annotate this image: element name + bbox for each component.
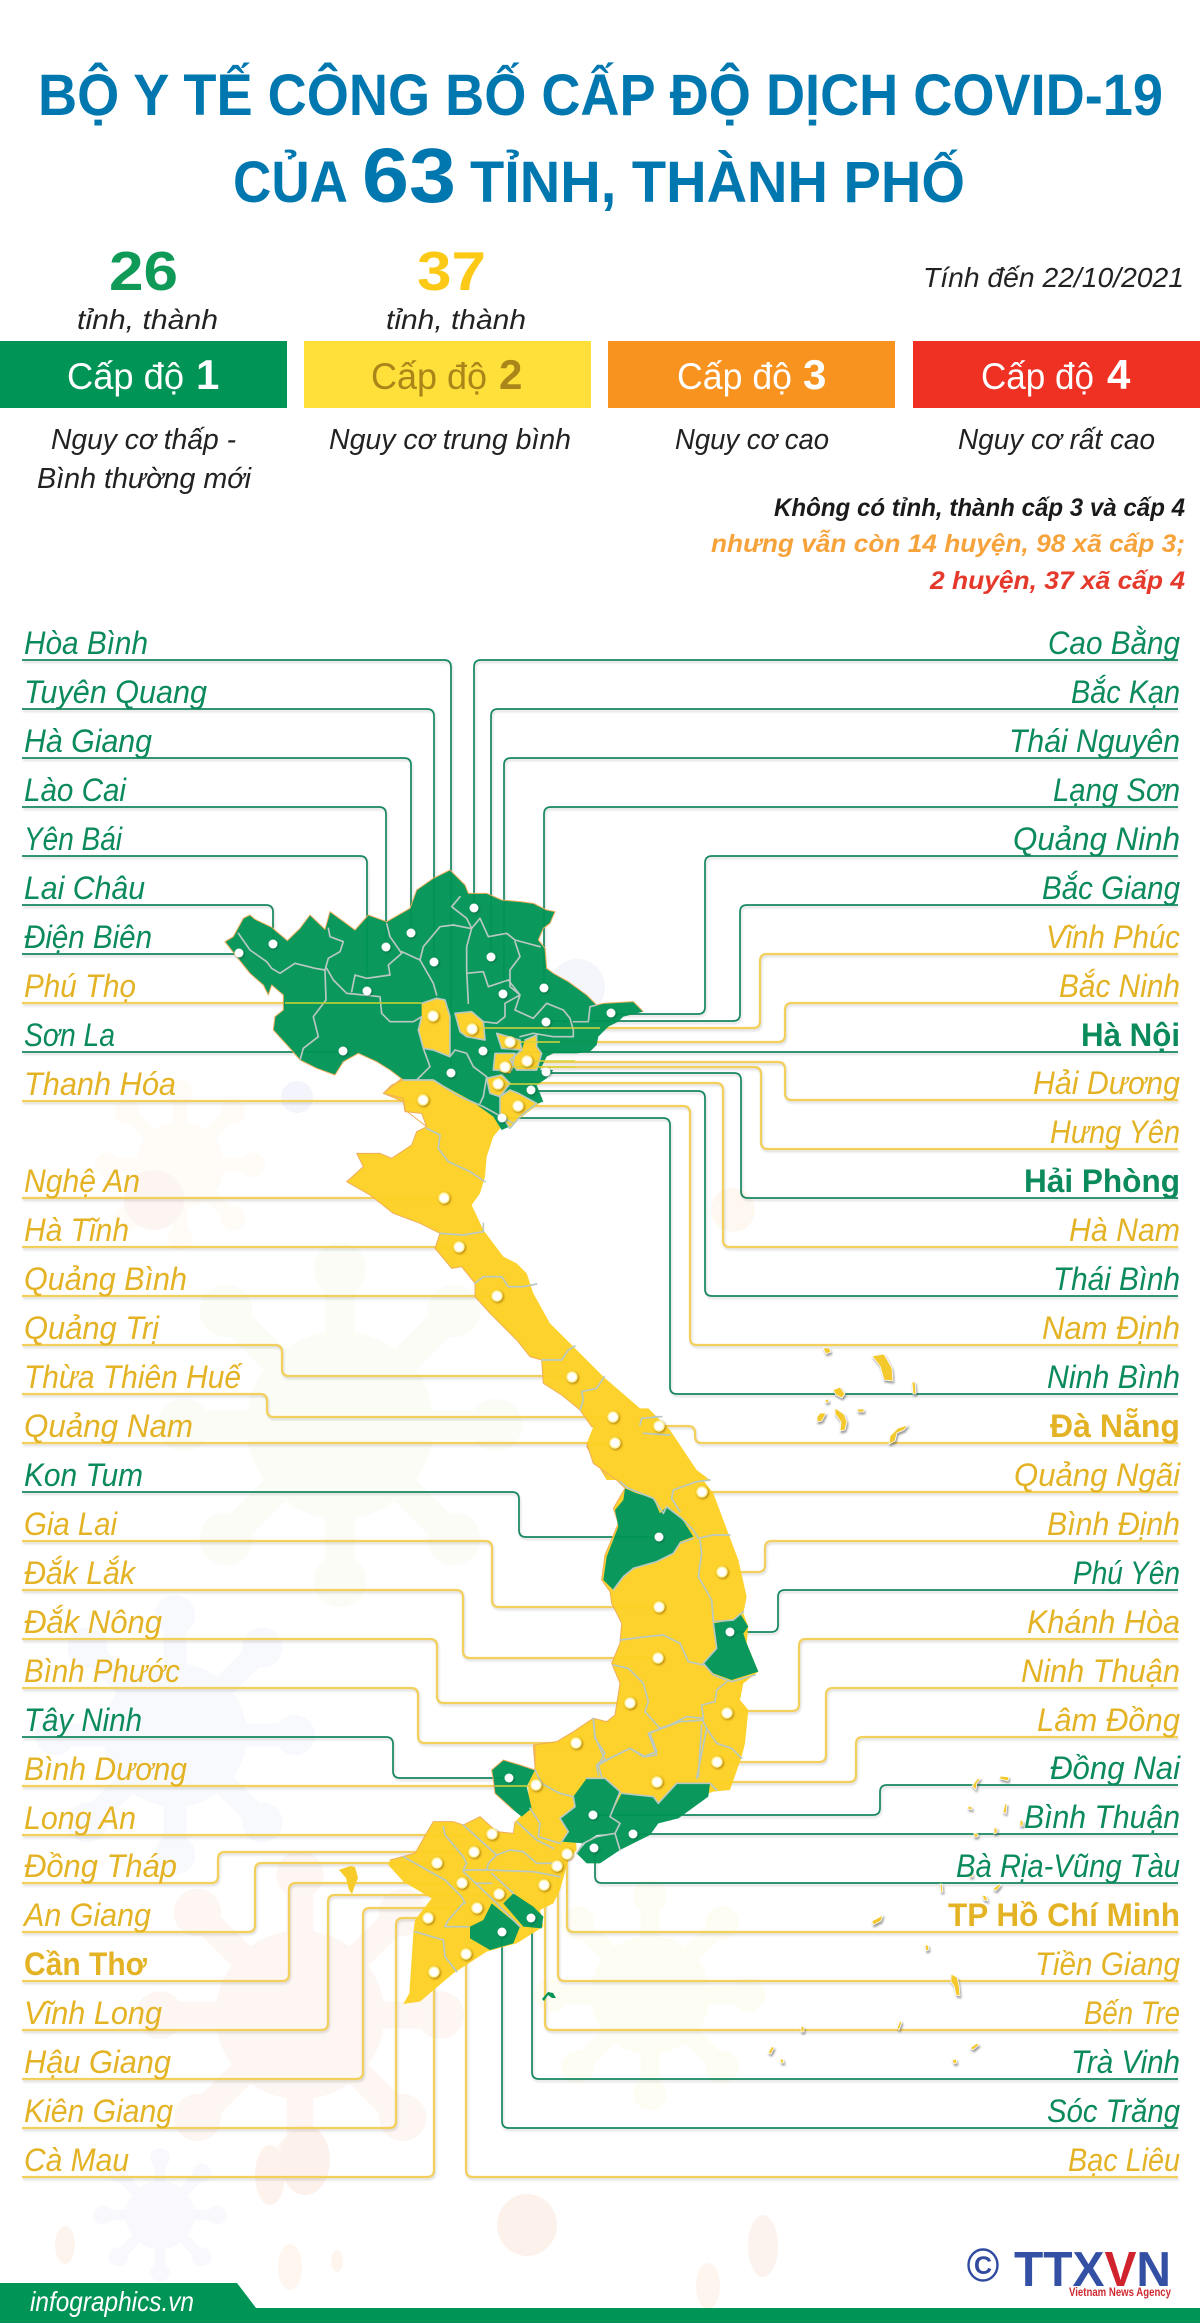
footer band	[0, 2283, 1200, 2323]
province labels: right column: Nam Định	[1042, 1310, 1180, 1346]
province: Phú Yên	[703, 1613, 758, 1680]
province labels: left column: Hà Giang	[24, 723, 152, 759]
province labels: left column: Quảng Bình	[24, 1261, 187, 1297]
province labels: right column: Hà Nam	[1069, 1212, 1180, 1248]
map: central highlands and south central coast	[528, 1410, 758, 1820]
province labels: right column: Bến Tre	[1084, 1995, 1180, 2031]
province labels: right column: Hưng Yên	[1050, 1114, 1180, 1150]
province labels: left column: Thanh Hóa	[24, 1066, 176, 1102]
note on districts level 3 and 4	[711, 494, 1185, 595]
province: Đồng Nai	[560, 1778, 620, 1843]
level 3 bar	[608, 341, 895, 408]
level 4 bar: Cấp độ	[981, 356, 1094, 397]
province labels: left column: Tuyên Quang	[24, 674, 207, 710]
province labels: right column: Ninh Thuận	[1021, 1653, 1180, 1689]
province: Phú Thọ	[418, 998, 450, 1057]
title: TỈNH, THÀNH PHỐ	[470, 150, 965, 215]
footer band: infographics.vn	[30, 2286, 194, 2317]
icon: copyright	[968, 2250, 998, 2280]
risk descriptions: Bình thường mới	[37, 463, 253, 495]
map: northern provinces	[225, 870, 643, 1130]
province labels: left column: Quảng Trị	[24, 1310, 160, 1346]
province: Hải Dương	[510, 1035, 542, 1070]
province labels: left column: Lai Châu	[24, 870, 145, 906]
risk descriptions: Nguy cơ thấp -	[51, 424, 236, 456]
level 2 bar: 2	[499, 351, 522, 398]
province labels: left column: Đắk Lắk	[24, 1555, 137, 1591]
province labels: left column: Tây Ninh	[24, 1702, 142, 1738]
province labels: left column: Đắk Nông	[24, 1604, 162, 1640]
province labels: right column: Vĩnh Phúc	[1046, 919, 1180, 955]
risk descriptions	[37, 424, 1155, 495]
province: Bình Thuận	[610, 1783, 710, 1850]
province: Tây Ninh	[492, 1760, 535, 1817]
province labels: left column: Quảng Nam	[24, 1408, 193, 1444]
leader lines: yellow provinces	[22, 954, 1178, 2177]
province labels: left column: Long An	[24, 1800, 136, 1836]
stat: 37 provinces level 2: tỉnh, thành	[386, 304, 526, 335]
stat: 26 provinces level 1: tỉnh, thành	[77, 304, 218, 335]
province labels: right column: Bình Thuận	[1024, 1799, 1180, 1835]
province labels: left column: Điện Biên	[24, 919, 152, 955]
date note: Tính đến 22/10/2021	[923, 262, 1184, 293]
stat: 37 provinces level 2: 37	[417, 240, 486, 302]
province: Bắc Ninh	[497, 1033, 522, 1050]
title	[38, 63, 1163, 219]
title: 63	[362, 133, 456, 219]
level 1 bar: 1	[196, 351, 219, 398]
risk descriptions: Nguy cơ trung bình	[329, 424, 571, 456]
province labels: left column: Hà Tĩnh	[24, 1212, 129, 1248]
province labels: right column: Bình Định	[1047, 1506, 1180, 1542]
province labels: right column: Quảng Ninh	[1013, 821, 1180, 857]
province labels: right column: Thái Nguyên	[1009, 723, 1180, 759]
province labels: right column: Bắc Kạn	[1071, 674, 1180, 710]
stat: 37 provinces level 2	[386, 240, 526, 335]
province: Vĩnh Phúc	[455, 1012, 485, 1040]
province labels: left column: Phú Thọ	[24, 968, 136, 1004]
province labels: right column: Bạc Liêu	[1068, 2142, 1180, 2178]
map of Vietnam by epidemic level	[225, 870, 758, 2004]
stat: 26 provinces level 1	[77, 240, 218, 335]
province labels: right column: TP Hồ Chí Minh	[948, 1897, 1180, 1933]
province: Nam Định	[500, 1090, 537, 1128]
risk descriptions: Nguy cơ rất cao	[958, 424, 1155, 456]
province labels: left column: Bình Phước	[24, 1653, 180, 1689]
province labels: right column: Khánh Hòa	[1027, 1604, 1180, 1640]
province labels: right column: Sóc Trăng	[1047, 2093, 1180, 2129]
province labels: left column: Bình Dương	[24, 1751, 187, 1787]
map: central coast	[347, 1063, 710, 1480]
province labels: right column: Lạng Sơn	[1053, 772, 1180, 808]
province labels: left column: Gia Lai	[24, 1506, 118, 1542]
note on districts level 3 and 4: 2 huyện, 37 xã cấp 4	[929, 567, 1185, 595]
level 3 bar: 3	[803, 351, 826, 398]
province labels: right column: Ninh Bình	[1047, 1359, 1180, 1395]
province labels: right column	[948, 625, 1181, 2178]
province labels: left column: Yên Bái	[24, 821, 123, 857]
province labels: left column: Cà Mau	[24, 2142, 129, 2178]
note on districts level 3 and 4: Không có tỉnh, thành cấp 3 và cấp 4	[774, 494, 1185, 522]
province labels: left column: Cần Thơ	[24, 1946, 147, 1982]
map: southeast and Mekong delta	[388, 1718, 717, 2004]
province labels: left column: Đồng Tháp	[24, 1848, 177, 1884]
province labels: right column: Đà Nẵng	[1050, 1408, 1180, 1444]
province labels: right column: Đồng Nai	[1050, 1750, 1181, 1786]
leader lines: green provinces	[22, 660, 1178, 2128]
province labels: right column: Trà Vinh	[1071, 2044, 1180, 2080]
map markers: yellow provinces	[418, 1011, 732, 1977]
province labels: right column: Thái Bình	[1053, 1261, 1180, 1297]
risk descriptions: Nguy cơ cao	[675, 424, 829, 456]
province labels: right column: Phú Yên	[1073, 1555, 1180, 1591]
island: Phú Quốc	[339, 1866, 358, 1894]
province labels: left column: Thừa Thiên Huế	[24, 1359, 243, 1395]
province labels: left column: Sơn La	[24, 1017, 115, 1053]
province labels: right column: Cao Bằng	[1048, 625, 1180, 661]
province: Hưng Yên	[493, 1053, 515, 1073]
icon: copyright: C	[974, 2252, 992, 2280]
province labels: right column: Lâm Đồng	[1037, 1702, 1180, 1738]
province labels: right column: Hải Phòng	[1024, 1163, 1180, 1199]
province labels: right column: Bắc Giang	[1042, 870, 1180, 906]
Phú Thọ leader line crossing the north	[285, 1002, 421, 1004]
province labels: left column: Kon Tum	[24, 1457, 143, 1493]
province labels: left column: Hậu Giang	[24, 2044, 171, 2080]
province labels: left column	[22, 625, 243, 2178]
province: Sóc Trăng	[470, 1903, 520, 1950]
level 1 bar	[0, 341, 287, 408]
province labels: left column: Hòa Bình	[24, 625, 148, 661]
title: CỦA	[233, 150, 348, 215]
note on districts level 3 and 4: nhưng vẫn còn 14 huyện, 98 xã cấp 3;	[711, 529, 1185, 558]
province labels: right column: Quảng Ngãi	[1014, 1457, 1181, 1493]
province: Kon Tum	[603, 1488, 693, 1590]
province: Bà Rịa-Vũng Tàu	[577, 1833, 620, 1863]
province labels: right column: Bà Rịa-Vũng Tàu	[956, 1848, 1180, 1884]
province labels: right column: Bắc Ninh	[1059, 968, 1180, 1004]
island: Côn Đảo	[542, 1992, 556, 2001]
level 4 bar: 4	[1107, 351, 1131, 398]
logo: TTXVN: Vietnam News Agency	[1069, 2287, 1172, 2299]
province labels: left column: Lào Cai	[24, 772, 127, 808]
leader lines crossing the delta provinces	[480, 1028, 600, 1786]
province labels: right column: Tiền Giang	[1035, 1946, 1180, 1982]
background virus decoration	[36, 959, 778, 2309]
province labels: left column: An Giang	[22, 1897, 151, 1933]
province: Trà Vinh	[503, 1893, 543, 1928]
province labels: left column: Nghệ An	[24, 1163, 140, 1199]
province labels: left column: Vĩnh Long	[24, 1995, 162, 2031]
level 4 bar	[913, 341, 1200, 408]
province labels: right column: Hà Nội	[1081, 1017, 1180, 1053]
level 1 bar: Cấp độ	[67, 356, 184, 397]
level 2 bar: Cấp độ	[371, 356, 487, 397]
level 2 bar	[304, 341, 591, 408]
province labels: right column: Hải Dương	[1033, 1065, 1180, 1101]
islands: Hoàng Sa and Trường Sa	[768, 1348, 1023, 2064]
province: Hà Nam	[487, 1075, 510, 1097]
province labels: left column: Kiên Giang	[24, 2093, 173, 2129]
logo: TTXVN: TTXVN	[1014, 2243, 1171, 2297]
level 3 bar: Cấp độ	[677, 356, 792, 397]
map markers: green provinces	[234, 904, 734, 1936]
stat: 26 provinces level 1: 26	[109, 240, 178, 302]
